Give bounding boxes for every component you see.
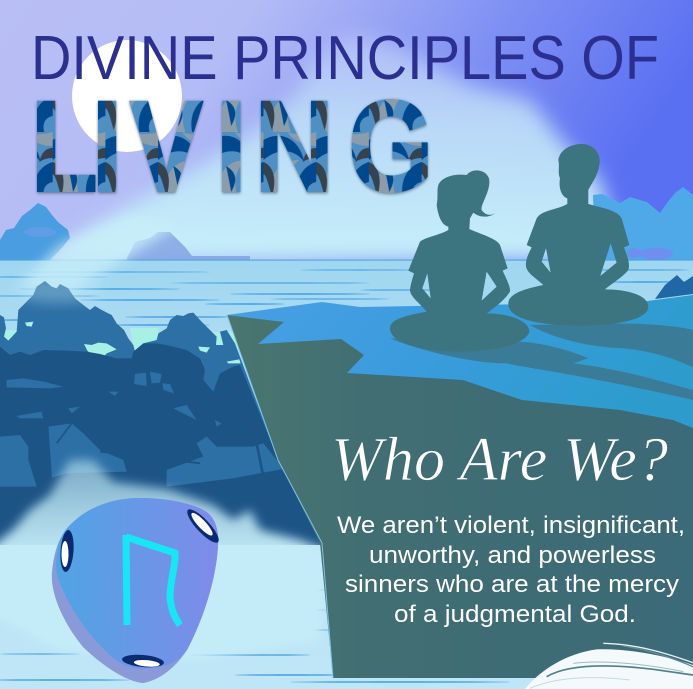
body text: We aren’t violent, insignificant, xyxy=(337,512,685,539)
bottom cloud xyxy=(0,460,330,660)
trees: centre distant xyxy=(127,232,250,260)
title: living: LIVING xyxy=(31,75,433,219)
stone spot bottom xyxy=(122,653,164,669)
cliff top surface xyxy=(227,295,693,430)
forest: front layer xyxy=(0,343,323,545)
stone spot right xyxy=(183,505,223,547)
stone spot left xyxy=(59,530,75,572)
stone underside xyxy=(52,498,218,683)
haze on tree tops xyxy=(13,277,103,303)
body text: of a judgmental God. xyxy=(394,601,636,628)
forest: lighter patches xyxy=(0,372,287,487)
forest: tree trunks xyxy=(33,410,263,483)
forest: back layer xyxy=(0,281,323,545)
body text: unworthy, and powerless xyxy=(369,542,656,569)
body text: sinners who are at the mercy xyxy=(345,571,679,598)
feather xyxy=(525,643,693,689)
heading: who are we: Who Are We? xyxy=(331,426,668,494)
small right rock xyxy=(655,275,693,299)
stone face xyxy=(56,498,218,669)
person: man xyxy=(508,144,648,326)
trees: far left xyxy=(0,203,70,260)
moon xyxy=(72,40,182,152)
main cloud xyxy=(50,34,625,262)
rune glyph xyxy=(126,535,180,625)
water xyxy=(0,260,693,689)
sky background xyxy=(0,0,693,262)
trees: far right xyxy=(593,187,693,260)
person: woman xyxy=(390,170,529,352)
cliff face xyxy=(227,315,693,678)
silhouette shadows xyxy=(390,323,693,400)
mint glow behind forest xyxy=(0,328,238,375)
rune stone xyxy=(52,498,223,683)
water ripples xyxy=(0,260,693,683)
body text xyxy=(337,512,685,628)
forest: mint gaps xyxy=(0,322,241,374)
left cloud beam xyxy=(20,215,180,300)
